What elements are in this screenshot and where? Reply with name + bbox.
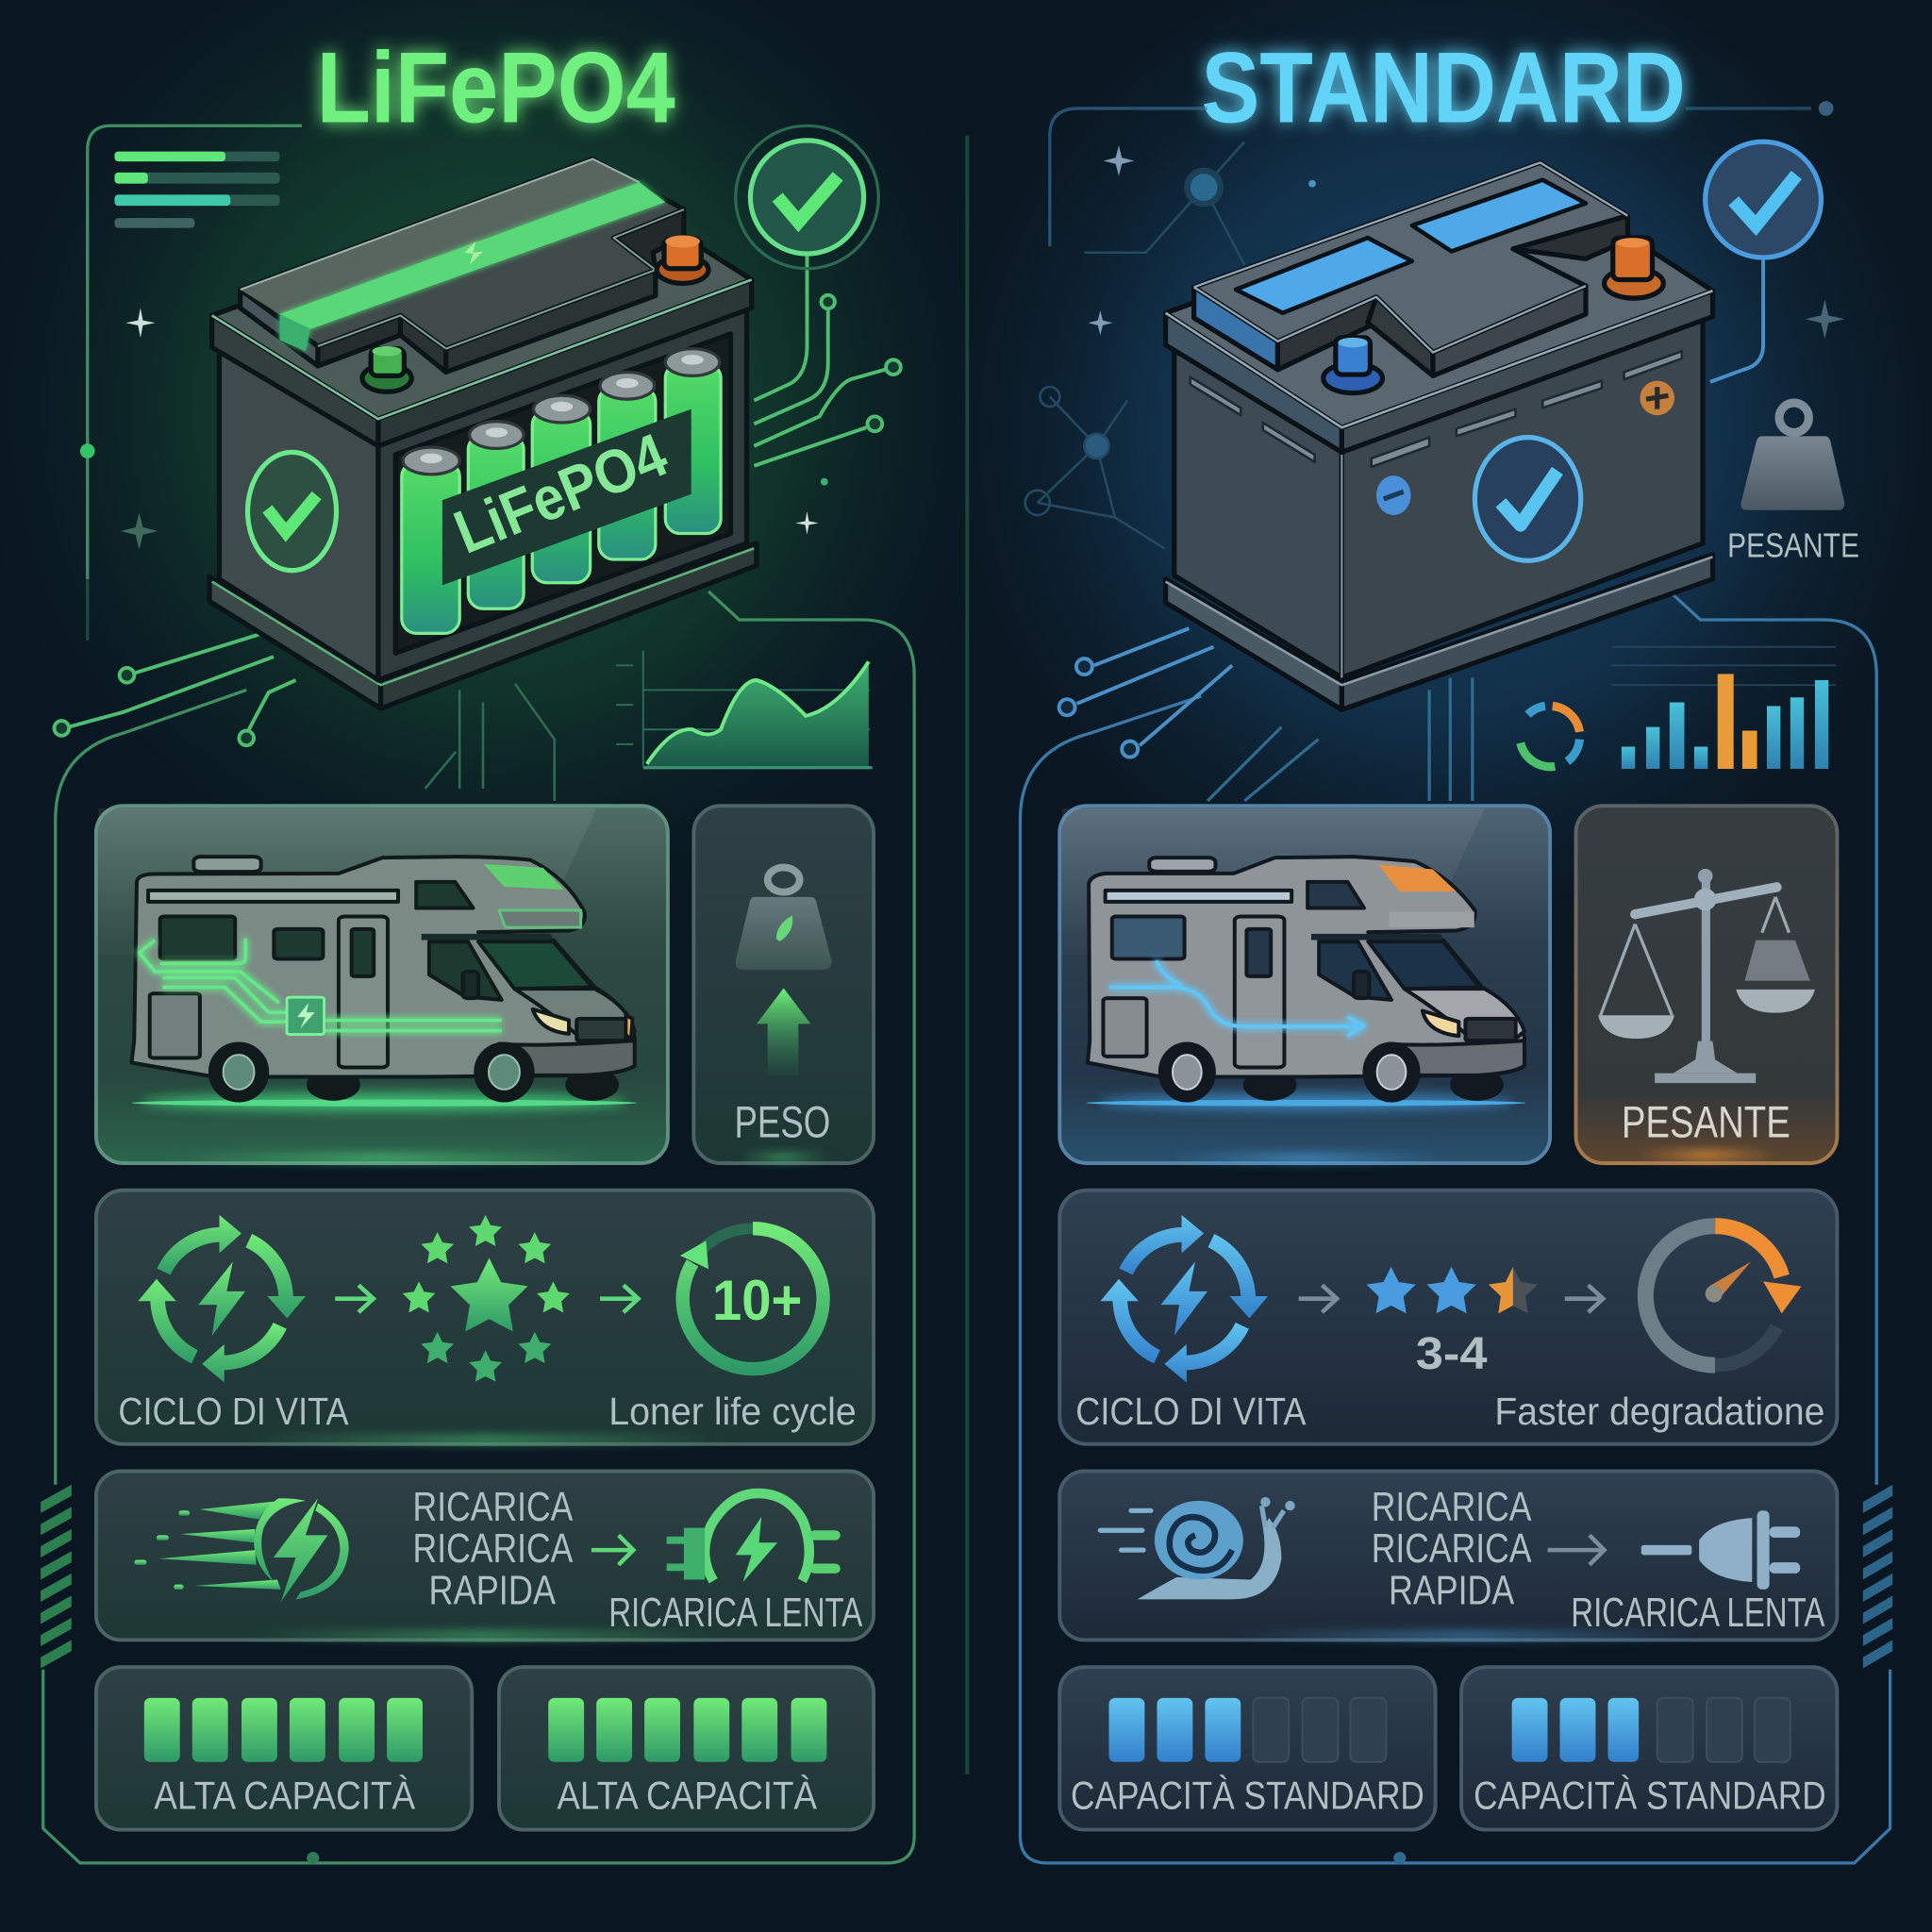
panel: lifetime Standard: [1059, 1191, 1837, 1444]
label: capacita standard: CAPACITÀ STANDARD: [1071, 1773, 1424, 1817]
arrow: [1299, 1285, 1337, 1312]
negative terminal: [1324, 338, 1382, 393]
capacity cells: [1109, 1698, 1386, 1762]
check badge: Standard: [1706, 142, 1821, 258]
battery cover block: [241, 158, 684, 372]
circuit traces: left: [54, 257, 901, 801]
frame: left column: [41, 125, 914, 1864]
battery: LiFePO4: [209, 158, 757, 708]
icon: snail: [1098, 1497, 1295, 1599]
label: alta capacita: ALTA CAPACITÀ: [154, 1773, 415, 1817]
icon: star ring: [403, 1215, 570, 1382]
check badge: LiFePO4: [736, 125, 878, 269]
positive terminal: [657, 235, 708, 283]
label: ricarica rapida: RICARICA: [413, 1526, 574, 1572]
icon: 10+ ring: 10+: [712, 1269, 802, 1332]
arrow: [1565, 1285, 1603, 1312]
circuit traces: right: [1059, 258, 1763, 801]
label: ricarica lenta: RICARICA LENTA: [1571, 1591, 1825, 1636]
panel: LiFePO4 weight: [693, 806, 874, 1163]
icon: charge cycle: [138, 1215, 306, 1382]
positive terminal: [1605, 238, 1663, 298]
line chart: [616, 651, 873, 768]
label: faster degradation: Faster degradatione: [1494, 1390, 1824, 1433]
arrow: [600, 1285, 639, 1312]
label: ricarica rapida: RICARICA: [413, 1485, 574, 1530]
plus marker: [1640, 381, 1674, 415]
label: ricarica rapida: RAPIDA: [1389, 1569, 1514, 1614]
body check badge: [248, 347, 337, 628]
label: peso: PESO: [734, 1097, 830, 1147]
arrow: [1547, 1535, 1605, 1565]
icon: plug charge: [667, 1493, 836, 1582]
side vents: [1191, 351, 1682, 467]
label: ricarica lenta: RICARICA LENTA: [608, 1591, 862, 1636]
HUD status bars: [114, 152, 279, 228]
battery lid rim: [212, 178, 752, 446]
body check badge: [1474, 438, 1581, 560]
label: 3-4: 3-4: [1416, 1328, 1488, 1379]
label: ciclo di vita: CICLO DI VITA: [1075, 1390, 1306, 1433]
label: ricarica rapida: RICARICA: [1372, 1526, 1532, 1572]
icon: 10+ ring: [680, 1228, 824, 1369]
bar chart: [1611, 647, 1836, 769]
icon: up arrow: [757, 989, 810, 1075]
panel: capacity LiFePO4 2: [499, 1667, 874, 1830]
label: pesante top: PESANTE: [1727, 525, 1859, 564]
label: pesante: PESANTE: [1622, 1097, 1790, 1147]
weight icon: top right: [1740, 403, 1844, 510]
icon: plug: [1641, 1510, 1800, 1590]
panel: capacity LiFePO4 1: [96, 1667, 472, 1830]
icon: scales: [1598, 869, 1815, 1083]
cell label: LiFePO4: [445, 420, 676, 567]
title: LiFePO4: LiFePO4: [317, 30, 675, 143]
battery green stripe: [279, 182, 665, 351]
network graph: right: [1025, 142, 1316, 548]
battery: Standard: [1166, 162, 1713, 709]
battery base: [1166, 555, 1713, 709]
icon: fast charge: [134, 1498, 349, 1602]
panel: charging Standard: [1059, 1472, 1837, 1640]
battery body: [219, 308, 747, 680]
cell window: [395, 334, 731, 653]
battery body: [1174, 317, 1703, 677]
panel: lifetime LiFePO4: [96, 1191, 874, 1444]
camper van: LiFePO4: [131, 857, 637, 1111]
donut chart: [1521, 706, 1579, 767]
capacity cells: [144, 1698, 423, 1762]
battery cover block: [1194, 162, 1627, 375]
camper van: Standard: [1086, 857, 1526, 1110]
panel: LiFePO4 camper: [96, 806, 668, 1163]
label: ricarica rapida: RAPIDA: [429, 1569, 556, 1614]
panel: Standard weight: [1576, 806, 1837, 1163]
label: alta capacita: ALTA CAPACITÀ: [557, 1773, 817, 1817]
battery lid rim: [1166, 178, 1713, 452]
frame: right column: [1020, 101, 1892, 1864]
lithium cells: [402, 349, 721, 633]
label: ricarica rapida: [1372, 1485, 1532, 1614]
title: STANDARD: STANDARD: [1201, 30, 1686, 143]
panel: capacity Standard 2: [1461, 1667, 1837, 1830]
sparkles: right: [1088, 145, 1844, 339]
label: longer life cycle: Loner life cycle: [608, 1390, 857, 1433]
capacity cells: [548, 1698, 826, 1762]
blue window panels: [1236, 180, 1586, 313]
arrow: [335, 1285, 374, 1312]
panel: charging LiFePO4: [96, 1472, 874, 1640]
minus marker: [1376, 475, 1411, 515]
icon: rating stars: [1367, 1267, 1538, 1313]
icon: light weight: [736, 868, 832, 970]
icon: speed gauge: [1645, 1226, 1802, 1365]
capacity cells: [1512, 1698, 1790, 1762]
label: capacita standard: CAPACITÀ STANDARD: [1474, 1773, 1826, 1817]
arrow: [591, 1535, 633, 1565]
panel: capacity Standard 1: [1059, 1667, 1436, 1830]
battery base: [209, 543, 757, 708]
label: ciclo di vita: CICLO DI VITA: [118, 1390, 349, 1433]
panel: Standard camper: [1059, 806, 1550, 1163]
negative terminal: [362, 346, 411, 391]
icon: charge cycle: [1100, 1215, 1268, 1382]
sparkles: left: [121, 308, 828, 550]
label: ricarica rapida: RICARICA: [1372, 1485, 1532, 1530]
label: ricarica rapida: [413, 1485, 574, 1614]
